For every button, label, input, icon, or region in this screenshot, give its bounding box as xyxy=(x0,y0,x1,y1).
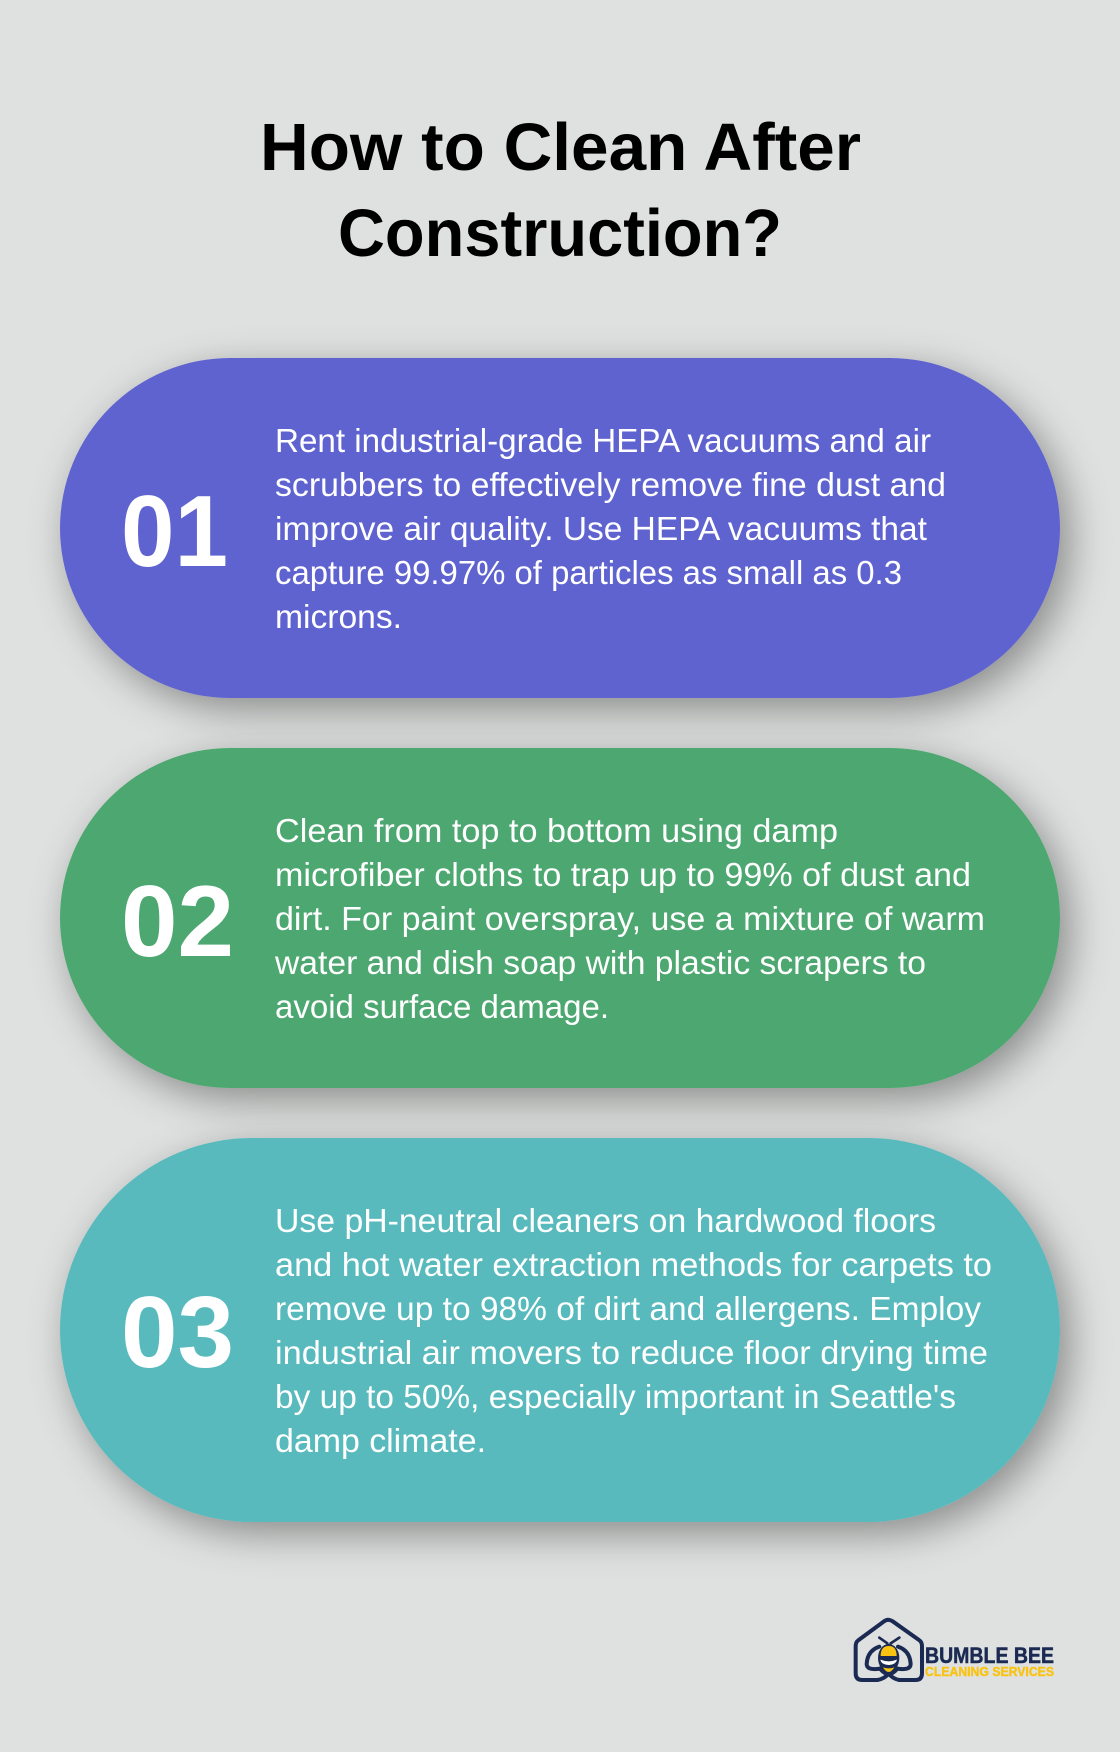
step 02 text: microfiber cloths to trap up to 99% of dust and xyxy=(275,856,971,893)
panel: step 02 xyxy=(60,748,1060,1088)
step 01 text: scrubbers to effectively remove fine dust and xyxy=(275,466,946,503)
wordmark: BUMBLE BEE xyxy=(925,1643,1054,1668)
title xyxy=(260,110,861,271)
step 02 text: Clean from top to bottom using damp xyxy=(275,812,838,849)
step 01 text: Rent industrial-grade HEPA vacuums and air xyxy=(275,422,931,459)
title: Construction? xyxy=(338,196,782,271)
step 03 text: damp climate. xyxy=(275,1422,486,1459)
title: How to Clean After xyxy=(260,110,861,185)
step 02 text: water and dish soap with plastic scrapers to xyxy=(274,944,926,981)
step 02 text xyxy=(274,812,985,1025)
step 02 text: avoid surface damage. xyxy=(275,988,609,1025)
panel: step 03 xyxy=(60,1138,1060,1522)
step 03 text xyxy=(275,1202,992,1459)
step 01 text: microns. xyxy=(275,598,402,635)
step 03 text: remove up to 98% of dirt and allergens. Employ xyxy=(275,1290,981,1327)
panel: step 01 xyxy=(60,358,1060,698)
step number 03: 03 xyxy=(121,1277,234,1389)
step number 02: 02 xyxy=(121,866,234,978)
step 01 text: capture 99.97% of particles as small as 0.3 xyxy=(275,554,902,591)
logo: Bumble Bee Cleaning Services xyxy=(856,1620,1054,1680)
icon: bee in house xyxy=(856,1620,922,1680)
step 01 text xyxy=(275,422,946,635)
step 03 text: by up to 50%, especially important in Seattle's xyxy=(275,1378,956,1415)
tagline: CLEANING SERVICES xyxy=(925,1664,1054,1679)
step 03 text: and hot water extraction methods for carpets to xyxy=(275,1246,992,1283)
step 03 text: Use pH-neutral cleaners on hardwood floors xyxy=(275,1202,936,1239)
step number 01: 01 xyxy=(121,476,228,588)
step 02 text: dirt. For paint overspray, use a mixture of warm xyxy=(275,900,985,937)
step 03 text: industrial air movers to reduce floor drying time xyxy=(275,1334,988,1371)
step 01 text: improve air quality. Use HEPA vacuums that xyxy=(275,510,927,547)
